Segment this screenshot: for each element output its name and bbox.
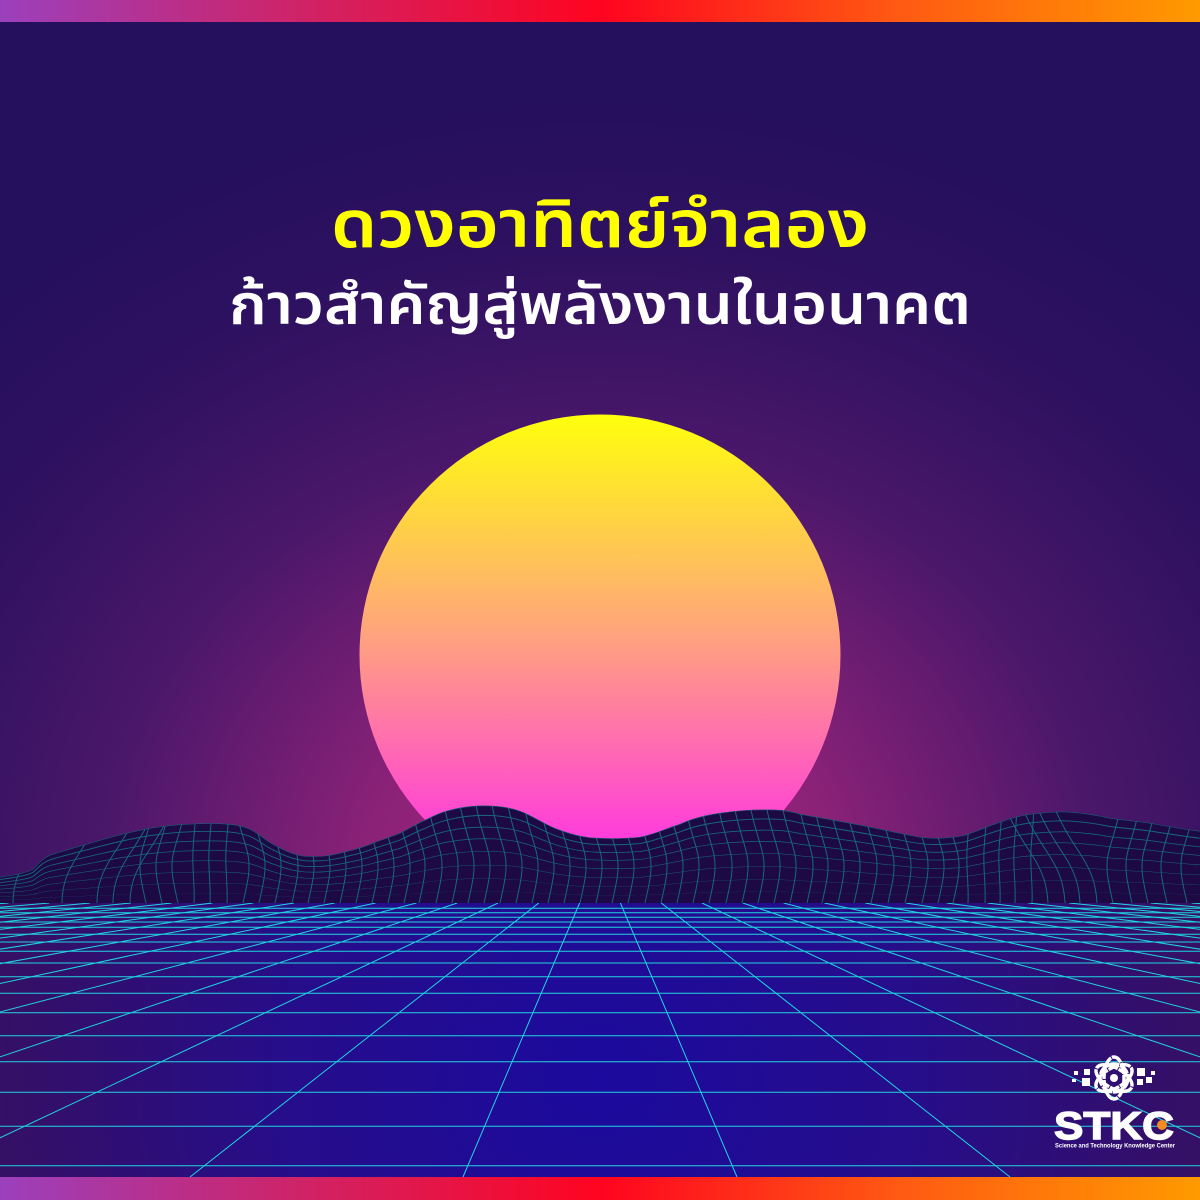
logo wordmark: STKC (1054, 1105, 1174, 1148)
title: ดวงอาทิตย์จำลอง (331, 177, 869, 277)
top gradient bar (0, 0, 1200, 22)
logo tagline: Science and Technology Knowledge Center (1055, 1144, 1176, 1150)
icon: atom (1072, 1057, 1155, 1099)
sun (360, 414, 840, 896)
bottom gradient bar (0, 1177, 1200, 1200)
logo dot (1157, 1120, 1167, 1130)
wireframe mountains (0, 795, 1200, 903)
subtitle: ก้าวสำคัญสู่พลังงานในอนาคต (229, 266, 971, 350)
perspective grid floor (0, 903, 1200, 1177)
logo: STKC (1054, 1057, 1176, 1150)
